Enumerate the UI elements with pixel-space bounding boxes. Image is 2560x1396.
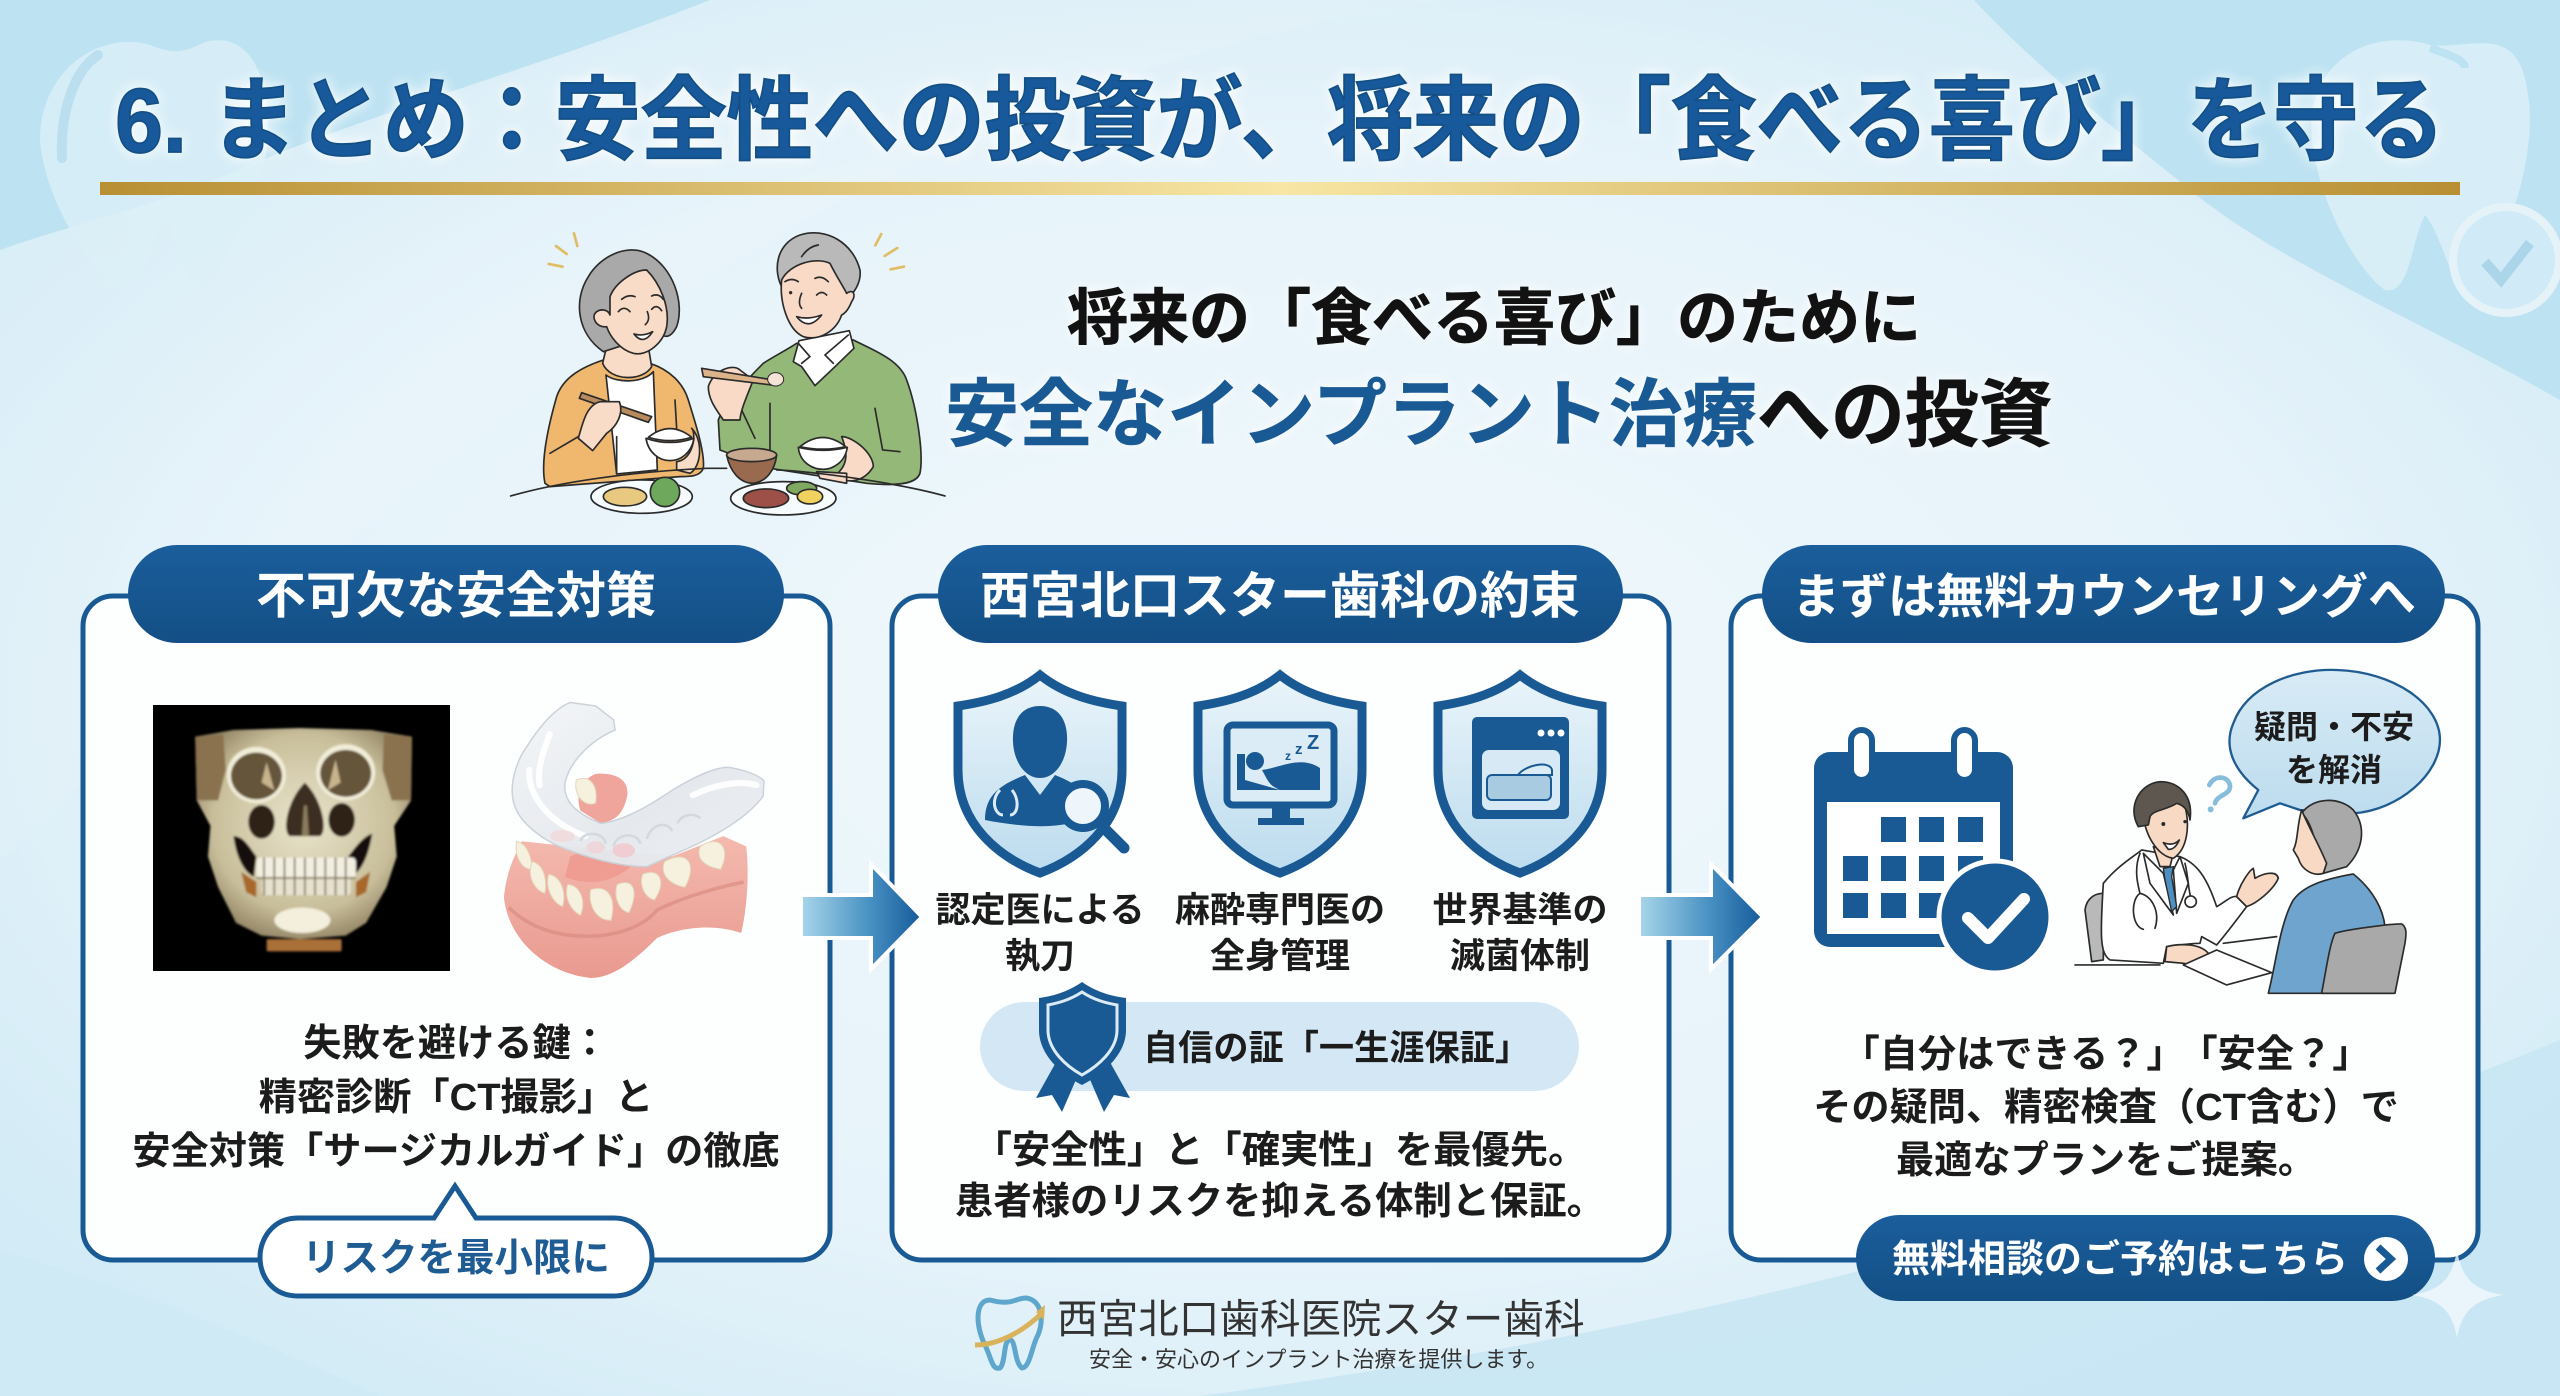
- man: [702, 233, 921, 485]
- panel: clinic promise: [892, 545, 1669, 1260]
- subheading: [945, 284, 2053, 456]
- watermark: tooth right with check: [2311, 40, 2559, 313]
- icon: shield with anesthesia monitor: [1198, 675, 1362, 873]
- text: counseling proposal: その疑問、精密検査（CT含む）で: [1813, 1086, 2399, 1129]
- title: 6. まとめ：安全性への投資が、将来の「食べる喜び」を守る: [115, 70, 2445, 172]
- panel heading: essential safety: [128, 545, 784, 643]
- badge: lifetime guarantee: 自信の証「一生涯保証」: [1143, 1029, 1530, 1068]
- icon: logo tooth: [975, 1298, 1045, 1368]
- icon: calendar with check: [1814, 730, 2051, 973]
- labels: three commitments: 全身管理: [1210, 937, 1350, 976]
- icon: shield with sterilizer: [1438, 675, 1602, 873]
- text: keys to avoiding failure: 精密診断「CT撮影」と: [259, 1076, 653, 1119]
- photo: surgical guide on denture model: [504, 702, 764, 978]
- panel: essential safety measures: [83, 545, 830, 1296]
- bubble text: を解消: [2286, 752, 2382, 788]
- text: counseling proposal: 「自分はできる？」 「安全？」: [1842, 1033, 2370, 1076]
- panel heading: clinic promise: 西宮北口スター歯科の約束: [980, 568, 1580, 624]
- text: counseling proposal: [1813, 1033, 2399, 1182]
- woman: [544, 250, 704, 487]
- gold divider: [100, 182, 2460, 195]
- subheading: 将来の「食べる喜び」のために: [1067, 284, 1921, 352]
- illustration: doctor consulting a patient: [2075, 670, 2440, 993]
- bubble text: [2254, 709, 2414, 788]
- call to action button: [1856, 1215, 2435, 1301]
- arrow: panel 2 to panel 3: [1639, 864, 1763, 969]
- icon: shield with anesthesia monitor: z: [1295, 741, 1302, 758]
- text: safety and certainty first: 患者様のリスクを抑える体制と保証。: [955, 1180, 1605, 1223]
- panel heading: clinic promise: [938, 545, 1623, 643]
- photo: CT skull scan: [153, 705, 450, 971]
- text: counseling proposal: 最適なプランをご提案。: [1896, 1139, 2316, 1182]
- watermark: tooth left: [40, 40, 268, 290]
- labels: three commitments: 世界基準の: [1432, 891, 1608, 930]
- arrow: panel 1 to panel 2: [801, 864, 922, 969]
- icon: shield with anesthesia monitor: Z: [1307, 732, 1319, 754]
- icon: shield with anesthesia monitor: z: [1285, 749, 1291, 763]
- text: safety and certainty first: [955, 1129, 1605, 1223]
- text: keys to avoiding failure: 安全対策「サージカルガイド」の徹底: [132, 1130, 780, 1173]
- badge: lifetime guarantee: [980, 982, 1579, 1112]
- labels: three commitments: 認定医による: [936, 891, 1144, 930]
- logo: 西宮北口歯科医院スター歯科: [1057, 1296, 1585, 1342]
- labels: three commitments: 滅菌体制: [1450, 937, 1590, 976]
- table and dishes: [511, 448, 945, 515]
- logo: 安全・安心のインプラント治療を提供します。: [1089, 1347, 1548, 1372]
- panel: free counseling: [1731, 545, 2478, 1301]
- bubble text: 疑問・不安: [2254, 709, 2414, 745]
- callout: minimize risk: リスクを最小限に: [302, 1237, 610, 1280]
- panel heading: free counseling: [1762, 545, 2445, 643]
- panel heading: essential safety: 不可欠な安全対策: [256, 568, 656, 624]
- illustration: elderly couple eating: [511, 233, 945, 515]
- text: safety and certainty first: 「安全性」と「確実性」を最優先。: [974, 1129, 1586, 1172]
- text: keys to avoiding failure: [132, 1022, 780, 1173]
- subheading: 安全なインプラント治療への投資: [945, 373, 2053, 456]
- text: keys to avoiding failure: 失敗を避ける鍵：: [303, 1022, 609, 1065]
- call to action button: 無料相談のご予約はこちら: [1892, 1239, 2348, 1281]
- panel heading: free counseling: まずは無料カウンセリングへ: [1792, 571, 2416, 624]
- labels: three commitments: 麻酔専門医の: [1175, 891, 1385, 930]
- logo: [975, 1296, 1585, 1372]
- icon: shield with certified doctor: [958, 675, 1124, 873]
- labels: three commitments: 執刀: [1005, 937, 1075, 976]
- callout: minimize risk: [260, 1186, 652, 1296]
- labels: three commitments: [936, 891, 1608, 976]
- sparkle: [2412, 1250, 2503, 1338]
